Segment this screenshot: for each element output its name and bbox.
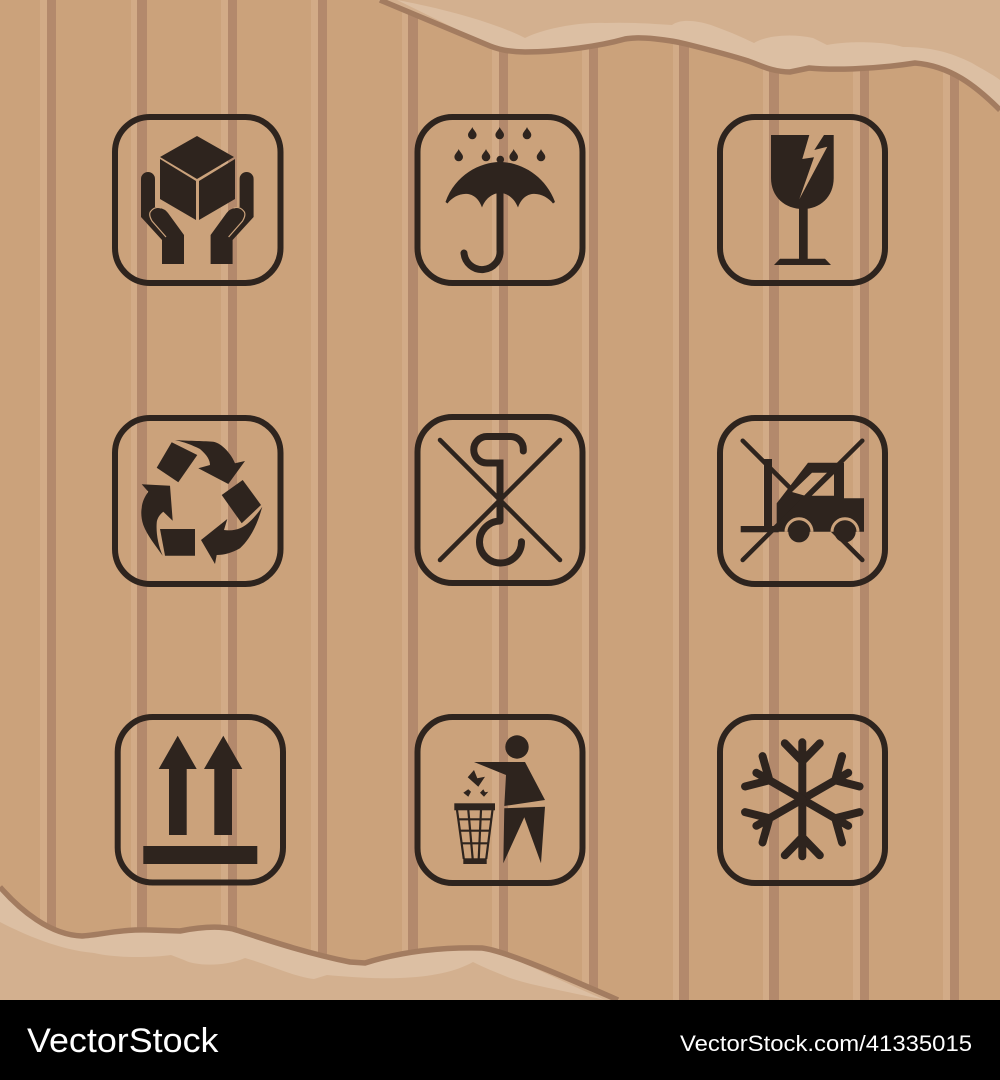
litter (463, 770, 488, 797)
torn paper: top right (378, 0, 1000, 110)
icon tile: this way up (118, 717, 283, 882)
icon tile: no forklift (720, 418, 885, 584)
footer bar (0, 1000, 1000, 1080)
person (474, 735, 545, 863)
forklift (741, 459, 864, 542)
umbrella (446, 156, 555, 270)
icon tile: recycling (115, 418, 280, 584)
icon tile: fragile glass (720, 117, 885, 283)
rain drops (454, 127, 545, 161)
crossed-out lines (440, 440, 560, 560)
box (160, 136, 235, 220)
diagonal in front of forklift (743, 441, 862, 560)
waste bin (454, 803, 495, 864)
diagonal behind forklift (743, 441, 862, 560)
icon tile: tidy man bin (418, 717, 582, 883)
footer url: VectorStock.com/41335015 (680, 1031, 972, 1056)
torn paper: bottom left (0, 887, 620, 1000)
icon tile: do not use hooks (418, 417, 582, 583)
icon tile: keep cold snowflake (720, 717, 885, 883)
hook (474, 436, 523, 563)
icon tile: keep dry umbrella (418, 117, 582, 283)
icon tile: handle with care (115, 117, 280, 283)
left hand (141, 172, 184, 264)
right hand (211, 172, 254, 264)
footer logo text: VectorStock (27, 1022, 219, 1060)
